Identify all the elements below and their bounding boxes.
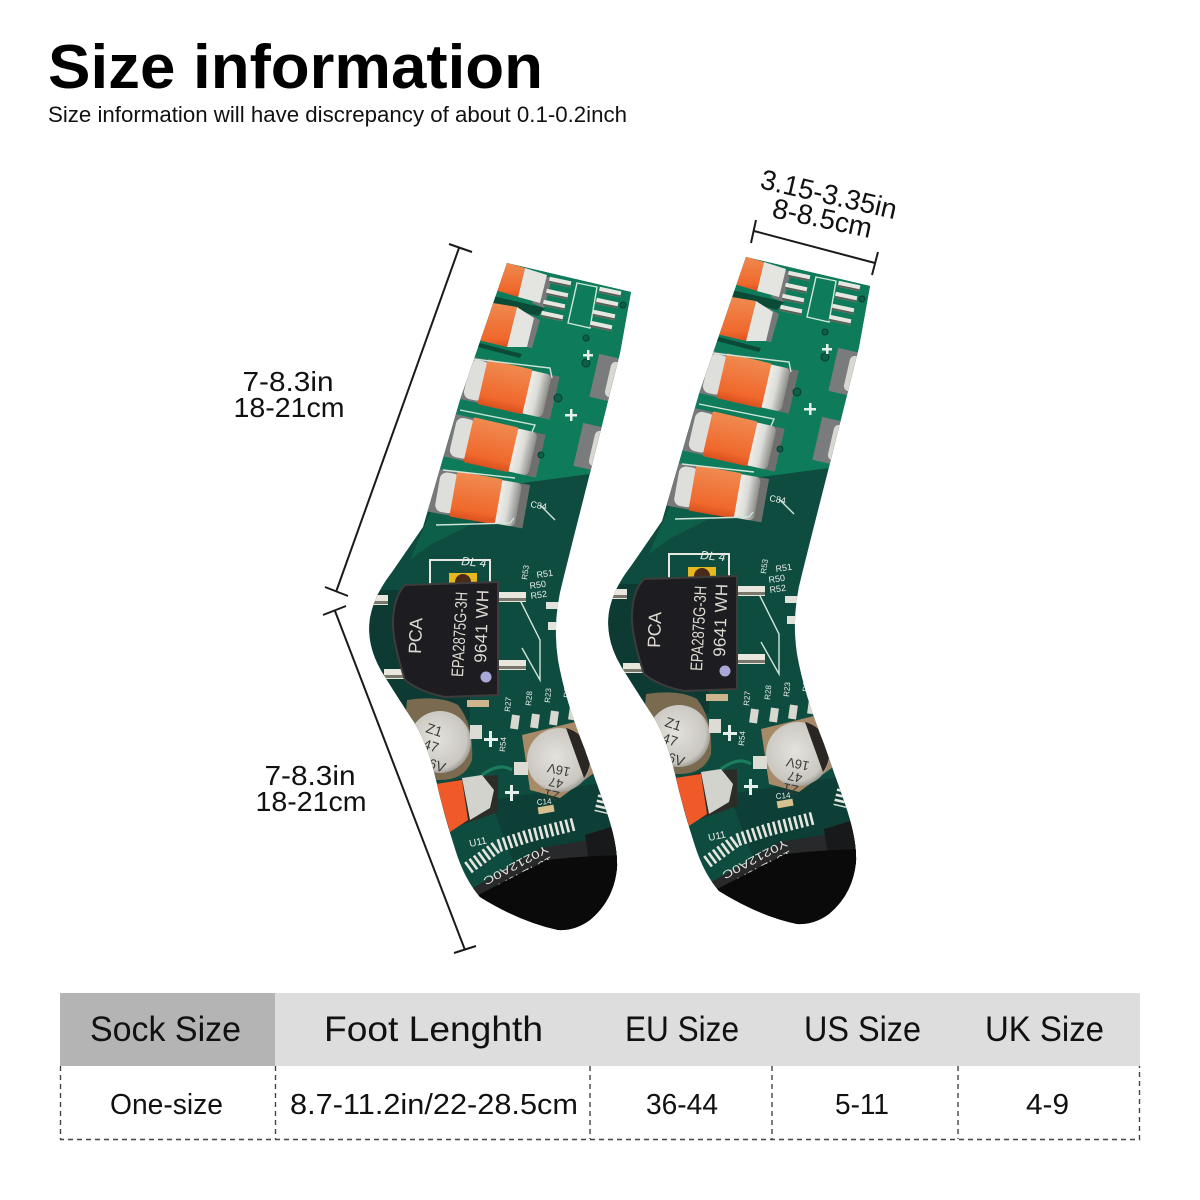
table header: sock size <box>60 993 275 1066</box>
left sock <box>360 250 640 940</box>
table row values: 5-11 <box>835 1089 889 1121</box>
right sock: 16V <box>785 754 811 774</box>
subtitle: Size information will have discrepancy of about 0.1-0.2inch <box>48 102 627 127</box>
right sock: EPA2875G-3H <box>687 585 710 671</box>
right sock: PCA <box>644 611 665 648</box>
left sock: DL 4 <box>461 554 487 570</box>
left sock: 47 <box>547 774 565 792</box>
foot length dimension <box>256 606 476 953</box>
size table <box>60 993 1140 1140</box>
table header: other columns: EU Size <box>625 1010 739 1049</box>
left sock: R28 <box>524 690 534 706</box>
title: Size information <box>48 33 543 102</box>
table header: sock size: Sock Size <box>90 1010 241 1049</box>
width dimension centimetres: 8-8.5cm <box>770 193 875 244</box>
table row values <box>110 1089 1069 1121</box>
right sock: DL 4 <box>700 548 726 564</box>
left sock: R29 <box>562 682 572 698</box>
left sock: U11 <box>468 835 488 850</box>
right sock: 9641 WH <box>710 584 732 657</box>
left sock: R54 <box>498 736 508 752</box>
right sock: 194249A <box>735 847 794 885</box>
left sock: 16V <box>546 760 572 780</box>
right sock: R53 <box>759 558 770 574</box>
right sock: Z1 <box>663 714 684 734</box>
left sock: 16V <box>419 753 448 776</box>
table row values: 4-9 <box>1026 1089 1069 1121</box>
right sock: R50 <box>768 573 786 585</box>
right sock: 47 <box>660 730 680 750</box>
left sock: PCA <box>405 617 426 654</box>
right sock: C84 <box>769 493 787 506</box>
right sock: 47 <box>786 768 804 786</box>
leg length label centimetres: 18-21cm <box>234 392 344 423</box>
table header: other columns: UK Size <box>985 1010 1104 1049</box>
width dimension inches: 3.15-3.35in <box>758 164 900 225</box>
left sock: C14 <box>536 797 552 807</box>
width dimension <box>751 164 900 275</box>
table row dashed grid <box>60 1066 1140 1140</box>
left sock: R53 <box>520 564 531 580</box>
foot length label centimetres: 18-21cm <box>256 786 366 817</box>
leg length label inches: 7-8.3in <box>242 366 334 397</box>
left sock: R52 <box>530 589 548 601</box>
left sock: R23 <box>543 687 553 703</box>
right sock: R51 <box>775 562 793 574</box>
table header: other columns: Foot Lenghth <box>324 1010 543 1049</box>
table row values: 8.7-11.2in/22-28.5cm <box>290 1089 578 1121</box>
right sock: R29 <box>801 676 811 692</box>
right sock <box>599 244 879 934</box>
right sock: R52 <box>769 583 787 595</box>
left sock: C84 <box>530 499 548 512</box>
left sock: 9641 WH <box>471 590 493 663</box>
left sock: 47 <box>421 736 441 756</box>
left sock: R51 <box>536 568 554 580</box>
right sock: Y0212A0C <box>720 836 789 881</box>
right sock: R54 <box>737 730 747 746</box>
table header: other columns <box>275 993 1140 1066</box>
left sock: Y0212A0C <box>481 842 550 887</box>
right sock: Z1 <box>782 780 800 798</box>
right sock: 16V <box>658 747 687 770</box>
right sock: R23 <box>782 681 792 697</box>
left sock: Z1 <box>424 720 445 740</box>
left sock: EPA2875G-3H <box>448 591 471 677</box>
leg length dimension <box>234 244 472 596</box>
table header: other columns: US Size <box>804 1010 921 1049</box>
left sock: R27 <box>503 696 513 712</box>
left sock: Z1 <box>543 786 561 804</box>
left sock: R50 <box>529 579 547 591</box>
table row values: One-size <box>110 1089 223 1121</box>
table row values: 36-44 <box>646 1089 718 1121</box>
foot length label inches: 7-8.3in <box>264 760 356 791</box>
right sock: R28 <box>763 684 773 700</box>
right sock: C14 <box>775 791 791 801</box>
right sock: U11 <box>707 829 727 844</box>
left sock: 194249A <box>496 853 555 891</box>
right sock: R27 <box>742 690 752 706</box>
